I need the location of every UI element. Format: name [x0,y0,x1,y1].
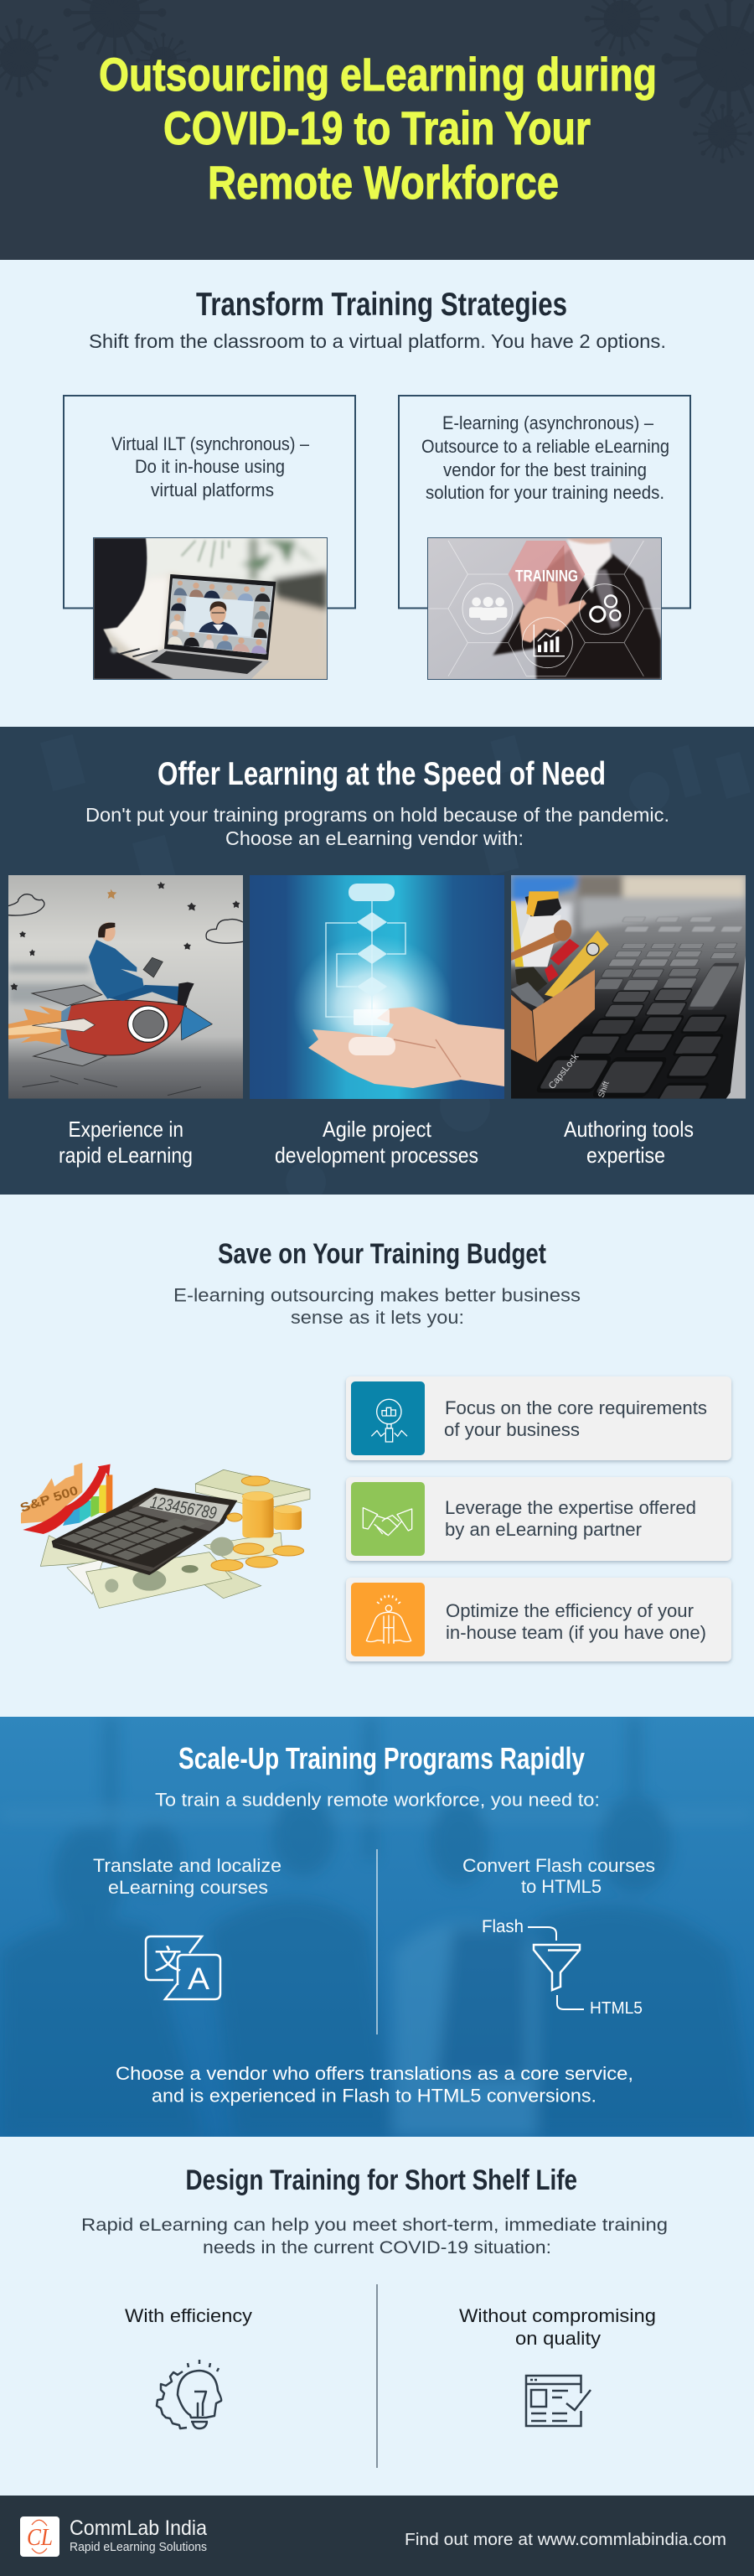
icon: gear and bulb [157,2360,221,2428]
option text [421,412,669,503]
caption: rapid eLearning [59,1117,193,1168]
man [109,985,178,1002]
card text: Focus on the core requirements [445,1397,707,1418]
subheading: E-learning outsourcing makes better business [173,1284,581,1306]
column heading [462,1855,655,1897]
man in suit [493,538,661,679]
column heading: eLearning courses [108,1877,268,1898]
logo: CL [27,2525,53,2551]
caption: authoring tools [564,1117,694,1168]
photo: toolbox on keyboard: CapsLock [547,1051,581,1091]
icon: caped hero [351,1583,425,1656]
icon: translate: 文 [154,1944,182,1975]
title: COVID-19 to Train Your [163,101,591,154]
photo: training touch interface [427,537,662,680]
flowchart nodes [349,884,395,997]
caption: rapid eLearning: Experience in [69,1117,183,1142]
main presenter [184,597,254,636]
banknotes [40,1469,310,1608]
option text: vendor for the best training [443,459,647,480]
subheading: Rapid eLearning can help you meet short-term, immediate training [81,2216,668,2235]
chart [21,1463,82,1523]
subheading: needs in the current COVID-19 situation: [203,2238,551,2257]
caption: rapid eLearning: rapid eLearning [59,1143,193,1168]
subheading [173,1284,581,1328]
photo: video call on laptop [93,537,328,680]
illustration: calculator, cash and chart: S&P 500 [18,1484,80,1516]
icon: magnifier over chart [351,1381,425,1455]
brand tagline: Rapid eLearning Solutions [70,2540,207,2554]
caption: agile processes: Agile project [323,1117,432,1142]
option text: solution for your training needs. [426,482,664,503]
logo [20,2516,59,2557]
card text [445,1497,696,1540]
hexagon label [509,541,585,609]
rocket [32,985,102,1006]
column heading: Translate and localize [93,1855,281,1876]
card text [444,1397,707,1440]
card text: Leverage the expertise offered [445,1497,696,1518]
illustration: calculator, cash and chart [18,1463,310,1608]
column: without compromising on quality [459,2305,656,2426]
video tiles [168,581,271,654]
footer [0,2496,754,2576]
photo: toolbox on keyboard [511,875,746,1107]
icon: document with check [526,2376,591,2426]
icon: funnel conversion: Flash [482,1917,524,1936]
card text [446,1600,706,1643]
icon: funnel conversion: HTML5 [590,1999,643,2018]
title: Remote Workforce [208,156,559,209]
virus pattern [0,0,754,163]
card text: of your business [444,1419,580,1440]
column: with efficiency [125,2305,252,2428]
option text [111,433,310,500]
option text: virtual platforms [151,479,274,500]
option box: virtual ILT [64,396,355,609]
option text: E-learning (asynchronous) – [442,412,654,433]
hexagon grid lines [428,541,661,676]
photo: man on rocket [8,875,243,1099]
caption: agile processes [275,1117,478,1168]
coins [242,1496,274,1537]
hand [308,1007,504,1088]
panel: title header [0,0,754,260]
icon: chart [522,618,572,668]
column heading [93,1855,281,1898]
card: optimize efficiency [346,1578,731,1661]
brand name: CommLab India [70,2516,207,2540]
option text: Outsource to a reliable eLearning [421,436,669,457]
title: Outsourcing eLearning during [99,48,657,101]
toolbox [511,891,609,1062]
laptop [137,648,270,679]
flowchart lines [326,901,405,1046]
icon: translate [146,1936,220,1999]
illustration: calculator, cash and chart: 123456789 [148,1493,219,1523]
caption: authoring tools: expertise [586,1143,665,1168]
icon: handshake [351,1482,425,1556]
caption: authoring tools: Authoring tools [564,1117,694,1142]
option box: e-learning [399,396,690,609]
subheading: sense as it lets you: [291,1307,464,1328]
panel: design training for short shelf life [0,2137,754,2496]
clouds [8,894,243,943]
column heading: to HTML5 [521,1876,602,1897]
closing note: and is experienced in Flash to HTML5 conversions. [152,2086,596,2106]
divider [376,1849,378,2034]
subheading [81,2216,668,2257]
website note: Find out more at www.commlabindia.com [405,2531,726,2549]
card text: Optimize the efficiency of your [446,1600,694,1621]
subheading: Don't put your training programs on hold because of the pandemic. [85,804,669,826]
option text: Virtual ILT (synchronous) – [111,433,310,454]
panel: transform training strategies [63,292,691,680]
heading: Scale-Up Training Programs Rapidly [178,1741,585,1775]
keyboard keys: middle rows [608,943,737,967]
icon: translate: A [188,1962,209,1996]
calculator [52,1488,237,1575]
column heading: Convert Flash courses [462,1855,655,1876]
card text: in-house team (if you have one) [446,1622,706,1643]
card: focus on core requirements [346,1376,731,1460]
title [99,48,657,209]
icon: people [462,583,513,634]
panel: offer learning at the speed of need [0,727,754,1202]
column: convert flash [462,1855,655,2018]
column: with efficiency: With efficiency [125,2305,252,2326]
closing note: Choose a vendor who offers translations as a core service, [116,2063,633,2084]
silhouette [94,538,173,679]
subheading: To train a suddenly remote workforce, you need to: [155,1789,600,1811]
icon: funnel conversion [482,1917,643,2018]
panel: save on your training budget [0,1195,754,1717]
subheading: Choose an eLearning vendor with: [225,827,524,849]
column: without compromising on quality: Without compromising [459,2305,656,2326]
card text: by an eLearning partner [445,1519,642,1540]
hand [519,581,586,643]
panel: scale-up training programs [0,1717,754,2137]
card: leverage expertise [346,1477,731,1561]
blurred team photo background [0,1717,754,2137]
photo: training touch interface: TRAINING [515,568,578,585]
stars [10,882,240,990]
heading: Save on Your Training Budget [218,1238,546,1270]
caption: agile processes: development processes [275,1143,478,1168]
photo: flowchart over hand [250,875,504,1099]
heading: Design Training for Short Shelf Life [186,2164,577,2196]
column: without compromising on quality: on quality [515,2328,601,2349]
heading: Transform Training Strategies [196,287,567,323]
photo: toolbox on keyboard: Shift [596,1080,612,1099]
keyboard keys: near rows [604,989,693,1017]
keyboard keys: far rows [622,917,743,932]
heading: Offer Learning at the Speed of Need [158,756,606,792]
option text: Do it in-house using [135,456,285,477]
subheading: Shift from the classroom to a virtual platform. You have 2 options. [89,330,666,352]
divider [376,2284,378,2468]
captions [59,1117,694,1168]
closing note [116,2063,633,2106]
benefit cards [346,1376,731,1661]
column: translate and localize [93,1855,281,1999]
icon: gears [580,584,630,635]
subheading [85,804,669,849]
